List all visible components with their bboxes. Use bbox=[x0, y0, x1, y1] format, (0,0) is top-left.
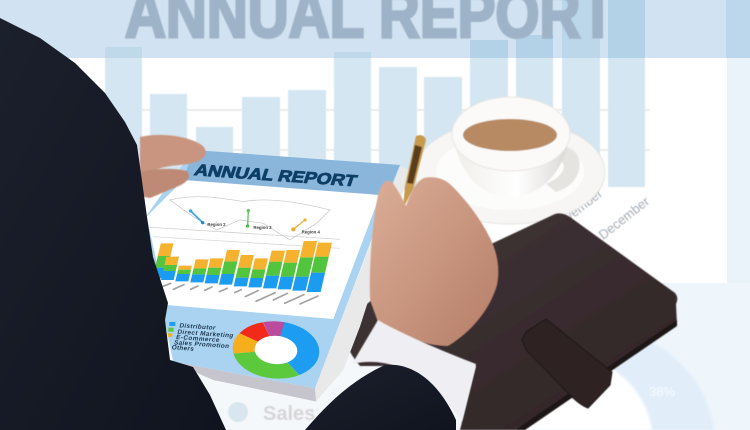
right sleeve bbox=[305, 365, 456, 430]
right hand bbox=[370, 177, 498, 346]
book header band bbox=[183, 150, 400, 196]
background pie bbox=[478, 330, 714, 430]
pie percent label: 38% bbox=[649, 384, 675, 399]
shirt cuff bbox=[352, 320, 476, 421]
book title: ANNUAL REPORT bbox=[192, 161, 359, 190]
book cover bbox=[143, 150, 400, 388]
left sleeve and jacket bbox=[0, 18, 226, 430]
month labels: November bbox=[549, 185, 606, 234]
left hand bbox=[140, 135, 206, 198]
map with regions bbox=[150, 197, 340, 248]
stacked bar chart bbox=[153, 241, 332, 292]
leather planner bbox=[342, 213, 677, 430]
coffee cup and saucer bbox=[415, 97, 605, 224]
donut chart bbox=[229, 317, 323, 383]
map with regions: Region 4 bbox=[302, 229, 321, 234]
report book bbox=[143, 150, 410, 402]
background bar chart bbox=[105, 0, 650, 190]
donut legend bbox=[168, 322, 234, 353]
top banner band bbox=[0, 0, 750, 58]
map with regions: Region 3 bbox=[253, 225, 272, 230]
map with regions: Region 2 bbox=[207, 222, 226, 227]
donut legend: Others bbox=[172, 344, 194, 353]
donut legend: Sales Promotion bbox=[174, 339, 229, 350]
book page edges bbox=[173, 362, 317, 402]
planner strap bbox=[522, 319, 612, 408]
donut legend: E-Commerce bbox=[176, 334, 220, 344]
white report page bbox=[147, 180, 380, 319]
donut legend: Distributor bbox=[179, 322, 216, 332]
month labels bbox=[549, 185, 653, 242]
background legend: Sales bbox=[263, 403, 315, 425]
donut legend: Direct Marketing bbox=[177, 329, 234, 340]
chart axis labels bbox=[161, 283, 318, 304]
background legend bbox=[228, 402, 315, 425]
month labels: December bbox=[596, 193, 653, 242]
pen bbox=[403, 135, 426, 208]
